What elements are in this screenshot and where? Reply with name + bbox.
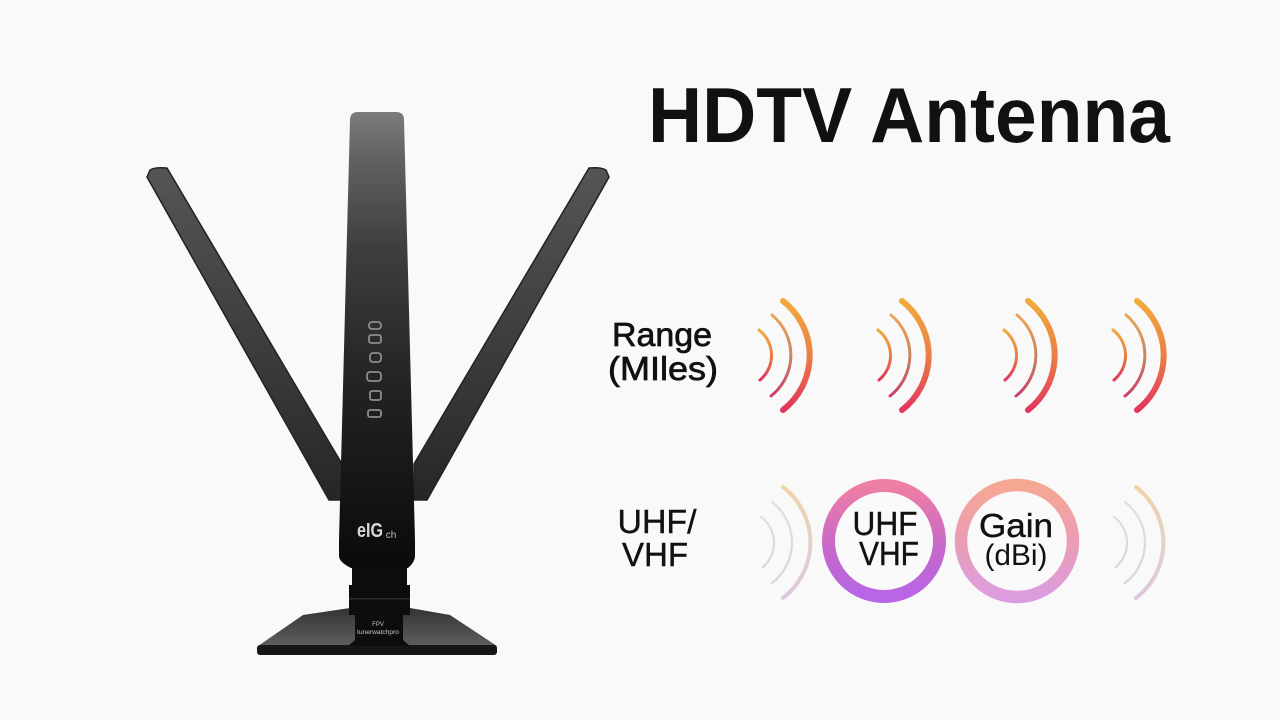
central mast (339, 112, 415, 568)
brand mark: eIG (357, 520, 383, 542)
base sublabel: tunerwatchpro (357, 630, 400, 636)
icon: gain ring (961, 485, 1073, 597)
UHF/VHF label: VHF (622, 536, 688, 573)
status indicators (367, 322, 381, 417)
UHF/VHF label: UHF/ (618, 503, 697, 540)
title: HDTV Antenna (648, 71, 1171, 159)
UHF/VHF label (618, 503, 697, 573)
icon: UHF VHF ring: VHF (859, 535, 919, 572)
range label: Range (612, 316, 712, 353)
left antenna arm (147, 168, 342, 500)
icon: UHF VHF ring: UHF (852, 505, 918, 542)
base label: FPV (372, 622, 384, 628)
icon: faded signal waves right (1114, 487, 1163, 598)
base plate (257, 608, 497, 655)
model mark: ch (386, 530, 396, 541)
icon: UHF VHF ring (828, 486, 940, 596)
icon: antenna (147, 112, 609, 655)
neck and collar (348, 565, 410, 646)
icon: gain ring: (dBi) (984, 539, 1048, 572)
icon: signal waves row 1 (759, 301, 1164, 410)
range label: (MIles) (608, 350, 718, 387)
icon: faded signal waves left (761, 487, 810, 598)
right antenna arm (414, 168, 609, 500)
range label (608, 316, 718, 387)
icon: gain ring: Gain (979, 507, 1053, 544)
